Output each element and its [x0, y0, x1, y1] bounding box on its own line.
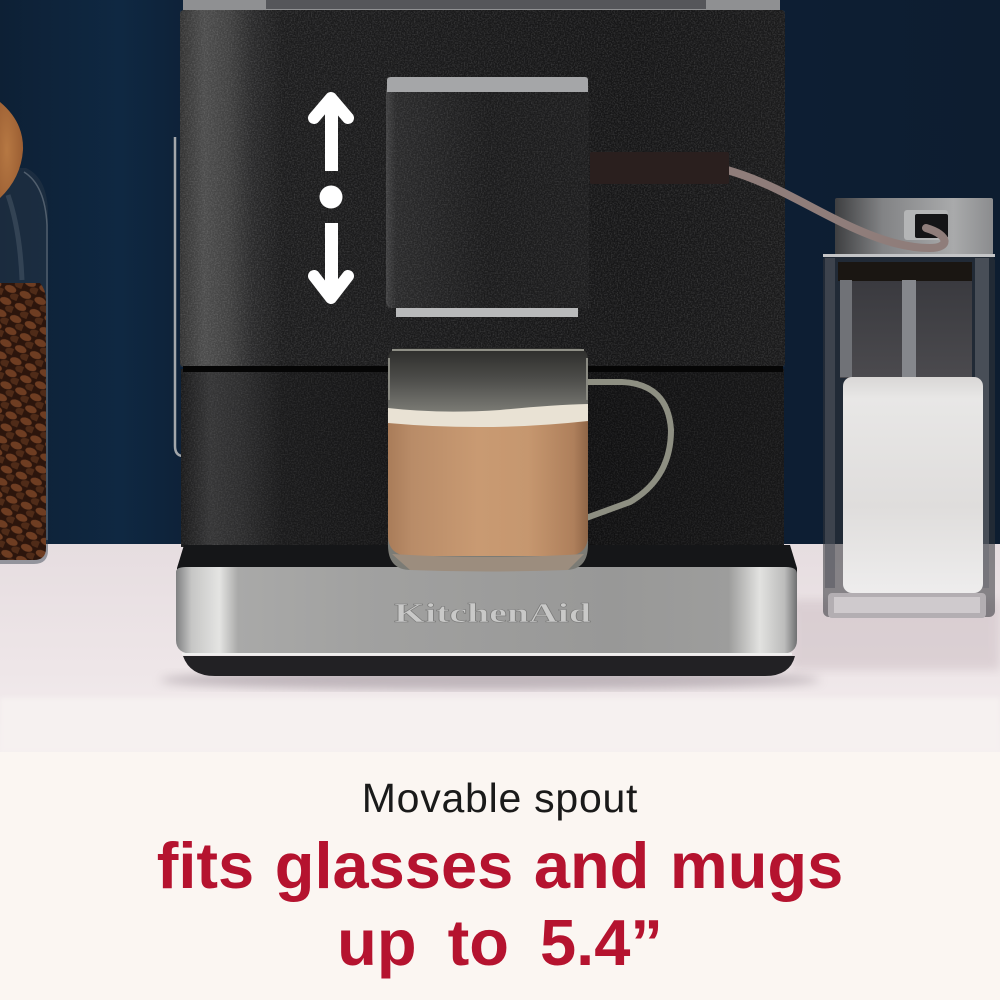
milk tube [590, 152, 945, 248]
up and down arrows [314, 98, 348, 298]
caption panel [0, 752, 1000, 1000]
machine body lower [181, 369, 784, 547]
jar of coffee beans [0, 102, 48, 564]
steel base with brand [176, 567, 797, 676]
machine side handle [175, 137, 182, 456]
milk carafe [823, 198, 995, 618]
jar cork lid [0, 102, 23, 198]
glass mug with coffee [388, 348, 671, 572]
countertop [0, 544, 1000, 752]
background wall [0, 0, 1000, 546]
brand name: KitchenAid [394, 598, 591, 628]
headline line one: fits glasses and mugs [157, 829, 843, 902]
movable spout [386, 77, 589, 317]
drip tray grate [177, 545, 797, 575]
top steel trim [183, 0, 780, 10]
headline line two: up to 5.4” [337, 906, 663, 979]
machine body upper [180, 10, 785, 367]
subtitle: Movable spout [362, 775, 638, 821]
